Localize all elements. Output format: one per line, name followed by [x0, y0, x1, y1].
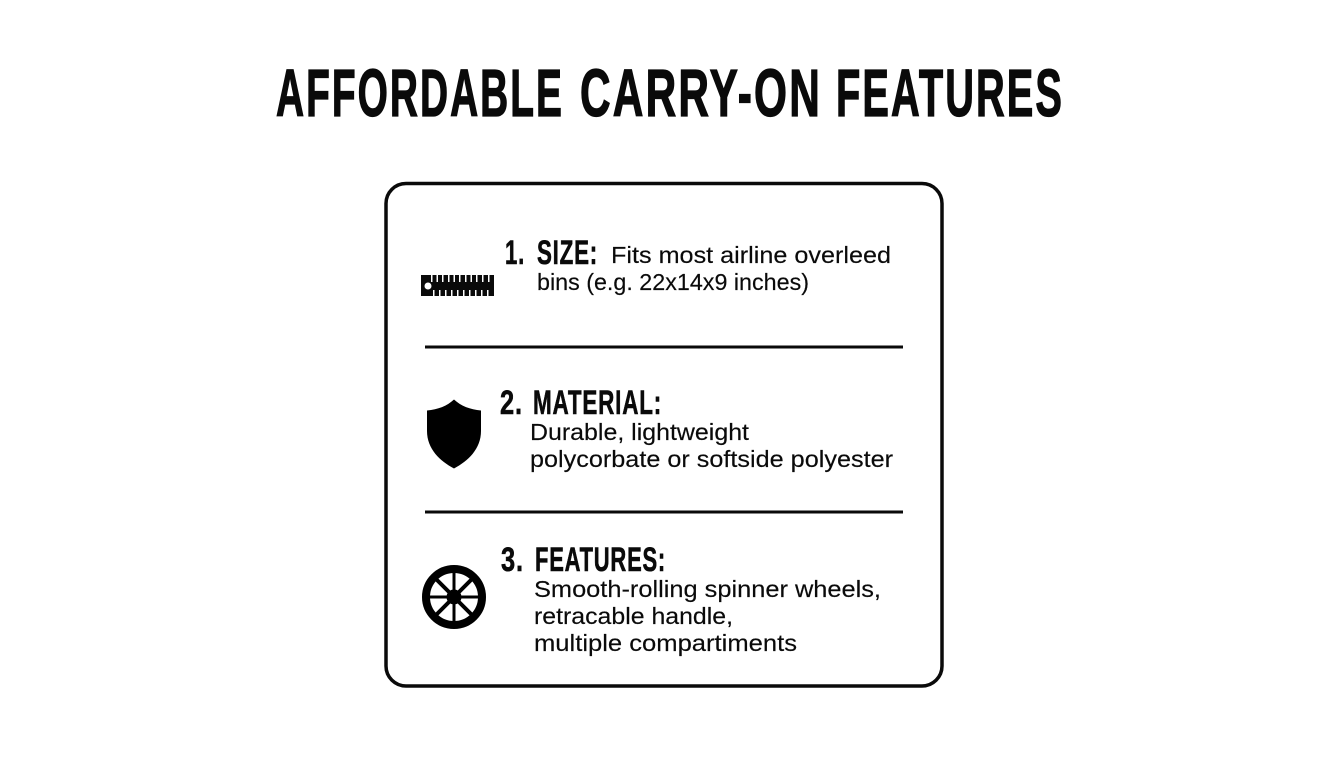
heading: size: SIZE: — [537, 234, 598, 272]
text: features description: multiple compartiments — [534, 630, 797, 656]
title: AFFORDABLE — [276, 56, 564, 131]
heading: material: MATERIAL: — [533, 384, 662, 422]
heading: features — [501, 541, 666, 579]
text: size description — [537, 242, 891, 295]
text: size description: Fits most airline overleed — [611, 242, 891, 268]
heading: material: 2. — [500, 384, 523, 422]
text: material description — [530, 419, 893, 472]
heading: size: 1. — [505, 234, 525, 272]
icon: shield — [427, 400, 481, 468]
heading: size — [505, 234, 598, 272]
panel: features card — [386, 184, 942, 686]
title: CARRY-ON — [580, 56, 822, 131]
heading: features: 3. — [501, 541, 524, 579]
divider — [425, 510, 903, 514]
text: features description — [534, 576, 881, 656]
icon: wheel — [426, 569, 482, 625]
heading: material — [500, 384, 662, 422]
text: size description: bins (e.g. 22x14x9 inches) — [537, 269, 809, 295]
text: material description: Durable, lightweight — [530, 419, 750, 445]
heading: features: FEATURES: — [535, 541, 666, 579]
text: features description: Smooth-rolling spinner wheels, — [534, 576, 881, 602]
text: features description: retracable handle, — [534, 603, 733, 629]
title: FEATURES — [836, 56, 1064, 131]
text: material description: polycorbate or softside polyester — [530, 446, 893, 472]
icon: zipper — [421, 275, 494, 296]
divider — [425, 346, 903, 348]
title — [276, 56, 1064, 131]
